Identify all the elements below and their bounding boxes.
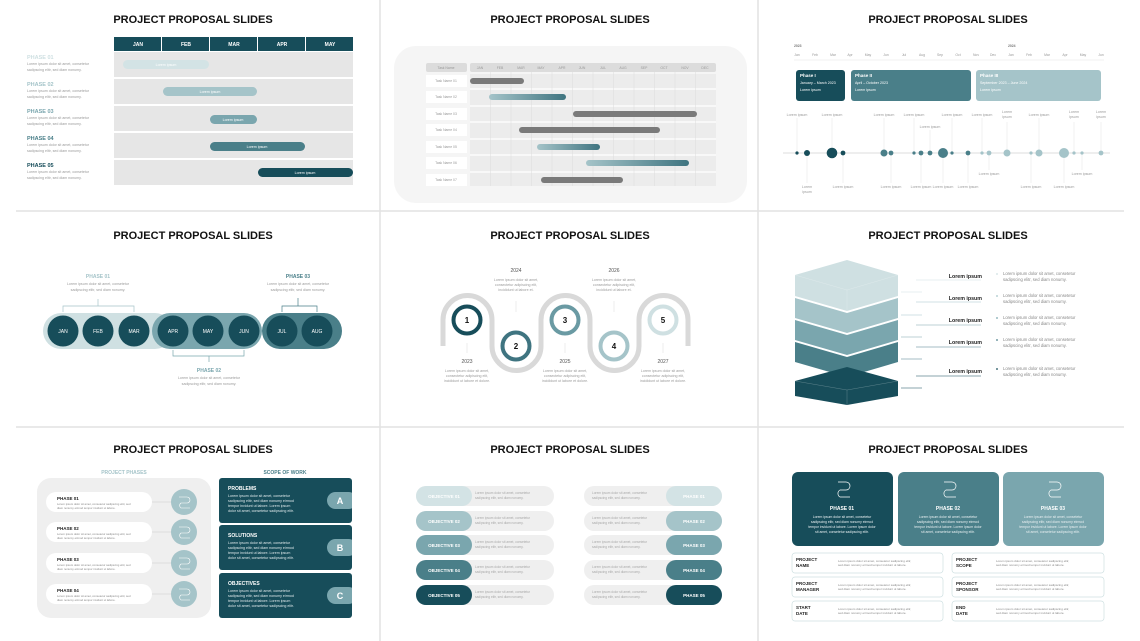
project phases column: diam nonumy eirmod tempor invidunt ut labore.	[57, 506, 116, 510]
phases list: sadipscing elitr, sed diam nonumy.	[592, 595, 641, 599]
project info table: Lorem ipsum dolor sit amet, consetetur sadipscing elitr,	[838, 559, 911, 563]
objectives list: Lorem ipsum dolor sit amet, consetetur	[475, 491, 531, 495]
objectives list: sadipscing elitr, sed diam nonumy.	[475, 570, 524, 574]
phase labels: sadipscing elitr, sed diam nonumy.	[27, 122, 82, 126]
phase pills: APR	[168, 329, 179, 335]
project info table: sed diam nonumy eirmod tempor invidunt ut labore.	[838, 587, 907, 591]
gantt grid: MAR	[517, 66, 525, 70]
project info table: PROJECT	[796, 557, 818, 562]
month axis: Jun	[883, 53, 889, 57]
month axis: Mar	[1044, 53, 1051, 57]
project phases column: PROJECT PHASES	[101, 470, 147, 476]
title: PROJECT PROPOSAL SLIDES	[113, 14, 273, 26]
dot timeline: Lorem ipsum	[874, 113, 894, 117]
objectives list: Lorem ipsum dolor sit amet, consetetur	[475, 540, 531, 544]
month header: MAY	[325, 42, 336, 48]
scope of work column: tempor invidunt ut labore. Lorem ipsum	[228, 551, 290, 555]
project info table: sed diam nonumy eirmod tempor invidunt ut labore.	[838, 563, 907, 567]
project info table: MANAGER	[796, 587, 820, 592]
phase cards	[792, 472, 1104, 546]
month axis: Feb	[812, 53, 818, 57]
gantt grid: OCT	[660, 66, 668, 70]
phase cards: sadipscing elitr, sed diam nonumy eirmod	[811, 520, 873, 524]
month axis	[794, 44, 1104, 60]
layer labels: sadipscing elitr, sed diam nonumy.	[1003, 321, 1067, 326]
phase labels: PHASE 01	[27, 55, 54, 61]
dot timeline: Lorem ipsum	[881, 185, 901, 189]
phase cards: sit amet, consetetur sadipscing elitr.	[815, 530, 869, 534]
phases list: PHASE 03	[683, 543, 705, 548]
dot timeline: Lorem	[802, 185, 812, 189]
phase labels with brackets: PHASE 02	[197, 368, 221, 374]
layer labels: Lorem ipsum dolor sit amet, consetetur	[1003, 315, 1076, 320]
project phases column: diam nonumy eirmod tempor invidunt ut labore.	[57, 598, 116, 602]
phase pills: MAR	[128, 329, 140, 335]
layer labels: Lorem ipsum	[949, 318, 982, 324]
phase boxes: September 2023 – June 2024	[980, 81, 1027, 85]
rows and bars	[114, 52, 353, 185]
scope of work column	[219, 470, 360, 618]
project phases column: PHASE 02	[57, 526, 79, 531]
project phases column: diam nonumy eirmod tempor invidunt ut labore.	[57, 567, 116, 571]
month axis: 2023	[794, 44, 802, 48]
phase labels: sadipscing elitr, sed diam nonumy.	[27, 95, 82, 99]
layer labels: sadipscing elitr, sed diam nonumy.	[1003, 299, 1067, 304]
phase pills: MAY	[203, 329, 214, 335]
title: PROJECT PROPOSAL SLIDES	[490, 14, 650, 26]
phases list: PHASE 01	[683, 494, 705, 499]
dot timeline: Lorem ipsum	[911, 185, 931, 189]
year labels: Lorem ipsum dolor sit amet,	[445, 369, 489, 373]
phase boxes: April – October 2023	[855, 81, 888, 85]
phase pills: AUG	[312, 329, 323, 335]
scope of work column: sadipscing elitr, sed diam nonumy eirmod	[228, 594, 294, 598]
phase labels with brackets: PHASE 01	[86, 274, 110, 280]
gantt grid	[426, 63, 716, 186]
panel: gantt 5 months	[27, 14, 353, 185]
dot timeline	[783, 110, 1110, 194]
phase labels with brackets: sadipscing elitr, sed diam nonumy.	[71, 288, 125, 292]
objectives list: OBJECTIVE 03	[428, 543, 460, 548]
panel: gantt 12 months	[394, 14, 747, 203]
dot timeline: ipsum	[1096, 115, 1106, 119]
phases list: PHASE 02	[683, 519, 705, 524]
gantt grid: APR	[559, 66, 566, 70]
month axis: Jun	[1098, 53, 1104, 57]
project info table: DATE	[956, 611, 968, 616]
project phases column: PHASE 03	[57, 557, 79, 562]
phase cards: sadipscing elitr, sed diam nonumy eirmod	[1022, 520, 1084, 524]
phase pills	[43, 313, 342, 349]
rows and bars: Lorem ipsum	[223, 118, 243, 122]
scope of work column: tempor invidunt ut labore. Lorem ipsum	[228, 599, 290, 603]
project info table: SCOPE	[956, 563, 972, 568]
phase cards: Lorem ipsum dolor sit amet, consetetur	[1024, 515, 1083, 519]
dot timeline: Lorem ipsum	[942, 113, 962, 117]
project info table	[792, 553, 1104, 621]
project phases column: diam nonumy eirmod tempor invidunt ut labore.	[57, 536, 116, 540]
gantt grid: JAN	[477, 66, 484, 70]
phase labels: Lorem ipsum dolor sit amet, consetetur	[27, 116, 90, 120]
phase boxes: January – March 2023	[800, 81, 836, 85]
panel: phases and scope of work	[37, 444, 360, 618]
project phases column: Lorem ipsum dolor sit amet, consetetur sadipscing elitr, sed	[57, 563, 131, 567]
month axis: Jul	[902, 53, 906, 57]
project info table: sed diam nonumy eirmod tempor invidunt ut labore.	[838, 611, 907, 615]
scope of work column: SOLUTIONS	[228, 533, 258, 539]
phase labels	[27, 55, 90, 180]
phase cards: tempor invidunt ut labore. Lorem ipsum dolor	[1019, 525, 1088, 529]
phase labels: Lorem ipsum dolor sit amet, consetetur	[27, 143, 90, 147]
numbered circles	[454, 306, 676, 360]
gantt grid: SEP	[641, 66, 648, 70]
month axis: Jan	[794, 53, 800, 57]
objectives list: sadipscing elitr, sed diam nonumy.	[475, 545, 524, 549]
gantt grid: Task Name 07	[435, 178, 457, 182]
objectives list: sadipscing elitr, sed diam nonumy.	[475, 496, 524, 500]
layer labels: Lorem ipsum dolor sit amet, consetetur	[1003, 366, 1076, 371]
year labels: incididunt ut labore et dolore.	[640, 379, 686, 383]
gantt grid: DEC	[701, 66, 709, 70]
phase cards: PHASE 02	[936, 506, 960, 512]
phase boxes: Phase I	[800, 73, 816, 78]
phase boxes: Lorem ipsum	[980, 88, 1001, 92]
project info table: PROJECT	[796, 581, 818, 586]
phases list: Lorem ipsum dolor sit amet, consetetur	[592, 565, 648, 569]
objectives list: Lorem ipsum dolor sit amet, consetetur	[475, 516, 531, 520]
layer labels: Lorem ipsum dolor sit amet, consetetur	[1003, 293, 1076, 298]
phase cards: Lorem ipsum dolor sit amet, consetetur	[813, 515, 872, 519]
project info table: END	[956, 605, 966, 610]
phase pills: FEB	[93, 329, 104, 335]
objectives list: OBJECTIVE 05	[428, 593, 460, 598]
year labels: consectetur adipiscing elit,	[495, 283, 537, 287]
project phases column: Lorem ipsum dolor sit amet, consetetur sadipscing elitr, sed	[57, 532, 131, 536]
year labels: Lorem ipsum dolor sit amet,	[592, 278, 636, 282]
phase labels with brackets: PHASE 03	[286, 274, 310, 280]
layer labels: sadipscing elitr, sed diam nonumy.	[1003, 372, 1067, 377]
phase labels: PHASE 03	[27, 109, 54, 115]
month axis: Mar	[830, 53, 837, 57]
phases list: sadipscing elitr, sed diam nonumy.	[592, 545, 641, 549]
objectives list: Lorem ipsum dolor sit amet, consetetur	[475, 565, 531, 569]
title: PROJECT PROPOSAL SLIDES	[490, 444, 650, 456]
title: PROJECT PROPOSAL SLIDES	[490, 230, 650, 242]
layer labels: Lorem ipsum dolor sit amet, consetetur	[1003, 271, 1076, 276]
phase labels with brackets: sadipscing elitr, sed diam nonumy.	[271, 288, 325, 292]
project info table: START	[796, 605, 811, 610]
project info table: NAME	[796, 563, 809, 568]
phases list: sadipscing elitr, sed diam nonumy.	[592, 570, 641, 574]
dot timeline: Lorem	[1096, 110, 1106, 114]
title: PROJECT PROPOSAL SLIDES	[868, 444, 1028, 456]
month axis: Aug	[919, 53, 925, 57]
dot timeline: Lorem ipsum	[787, 113, 807, 117]
objectives list	[416, 486, 554, 605]
dot timeline: Lorem ipsum	[904, 113, 924, 117]
project phases column: Lorem ipsum dolor sit amet, consetetur sadipscing elitr, sed	[57, 502, 131, 506]
layer labels: sadipscing elitr, sed diam nonumy.	[1003, 277, 1067, 282]
title: PROJECT PROPOSAL SLIDES	[868, 14, 1028, 26]
dot timeline: Lorem	[1069, 110, 1079, 114]
phases list	[584, 486, 722, 605]
gantt grid: Task Name 06	[435, 161, 457, 165]
gantt grid: AUG	[619, 66, 627, 70]
objectives list: OBJECTIVE 04	[428, 568, 460, 573]
dot timeline: Lorem ipsum	[979, 172, 999, 176]
gantt grid: Task Name	[438, 66, 455, 70]
scope of work column: PROBLEMS	[228, 486, 257, 492]
phase labels: Lorem ipsum dolor sit amet, consetetur	[27, 62, 90, 66]
phase labels: PHASE 04	[27, 136, 55, 142]
scope of work column: C	[337, 591, 344, 601]
objectives list: Lorem ipsum dolor sit amet, consetetur	[475, 590, 531, 594]
dot timeline: Lorem ipsum	[1054, 185, 1074, 189]
gantt grid: FEB	[497, 66, 504, 70]
scope of work column: sadipscing elitr, sed diam nonumy eirmod	[228, 499, 294, 503]
month axis: Apr	[847, 53, 854, 57]
phase cards: sit amet, consetetur sadipscing elitr.	[921, 530, 975, 534]
month axis: Nov	[973, 53, 979, 57]
dot timeline: Lorem ipsum	[822, 113, 842, 117]
year labels: 2025	[559, 359, 571, 365]
dot timeline: Lorem ipsum	[958, 185, 978, 189]
phase pills: JUN	[239, 329, 249, 335]
phase cards: PHASE 03	[1041, 506, 1065, 512]
year labels: 2023	[461, 359, 473, 365]
month header: MAR	[228, 42, 240, 48]
rows and bars: Lorem ipsum	[295, 171, 315, 175]
panel: winding timeline	[443, 230, 688, 383]
year labels: Lorem ipsum dolor sit amet,	[543, 369, 587, 373]
scope of work column: A	[337, 496, 344, 506]
scope of work column: dolor sit amet, consetetur sadipscing elitr.	[228, 604, 294, 608]
title: PROJECT PROPOSAL SLIDES	[113, 444, 273, 456]
dot timeline: Lorem ipsum	[1072, 172, 1092, 176]
phase labels: sadipscing elitr, sed diam nonumy.	[27, 176, 82, 180]
dot timeline: Lorem ipsum	[1021, 185, 1041, 189]
month header: APR	[277, 42, 288, 48]
phases list: Lorem ipsum dolor sit amet, consetetur	[592, 590, 648, 594]
rows and bars: Lorem ipsum	[200, 90, 220, 94]
month axis: May	[865, 53, 872, 57]
year labels: incididunt ut labore et dolore.	[542, 379, 588, 383]
month axis: May	[1080, 53, 1087, 57]
year labels: Lorem ipsum dolor sit amet,	[641, 369, 685, 373]
phases list: PHASE 05	[683, 593, 705, 598]
phase pills: JUL	[278, 329, 287, 335]
project phases column: Lorem ipsum dolor sit amet, consetetur sadipscing elitr, sed	[57, 594, 131, 598]
phase labels with brackets: Lorem ipsum dolor sit amet, consetetur	[67, 282, 130, 286]
panel: phase cards and project info	[792, 444, 1104, 621]
month axis: Sep	[937, 53, 943, 57]
year labels: consectetur adipiscing elit,	[544, 374, 586, 378]
layer labels	[901, 271, 1076, 388]
year labels: 2027	[657, 359, 669, 365]
month axis: Apr	[1062, 53, 1069, 57]
phase labels: Lorem ipsum dolor sit amet, consetetur	[27, 170, 90, 174]
layer labels: Lorem ipsum	[949, 340, 982, 346]
objectives list: sadipscing elitr, sed diam nonumy.	[475, 521, 524, 525]
objectives list: sadipscing elitr, sed diam nonumy.	[475, 595, 524, 599]
project info table: SPONSOR	[956, 587, 979, 592]
project info table: Lorem ipsum dolor sit amet, consetetur sadipscing elitr,	[996, 583, 1069, 587]
dot timeline: Lorem ipsum	[933, 185, 953, 189]
scope of work column: Lorem ipsum dolor sit amet, consetetur	[228, 541, 291, 545]
dot timeline: Lorem ipsum	[972, 113, 992, 117]
month axis: Oct	[955, 53, 961, 57]
year labels: consectetur adipiscing elit,	[593, 283, 635, 287]
rows and bars: Lorem ipsum	[247, 145, 267, 149]
project info table: sed diam nonumy eirmod tempor invidunt ut labore.	[996, 587, 1065, 591]
panel: stacked layers	[795, 230, 1076, 405]
year labels: consectetur adipiscing elit,	[446, 374, 488, 378]
layer labels: sadipscing elitr, sed diam nonumy.	[1003, 343, 1067, 348]
scope of work column: B	[337, 543, 344, 553]
numbered circles: 1	[465, 316, 470, 325]
phase labels with brackets	[63, 274, 330, 386]
phase boxes: Lorem ipsum	[855, 88, 876, 92]
panel: objectives and phases	[416, 444, 722, 605]
phase cards: Lorem ipsum dolor sit amet, consetetur	[919, 515, 978, 519]
project phases column	[37, 470, 211, 618]
phase labels with brackets: sadipscing elitr, sed diam nonumy.	[182, 382, 236, 386]
project info table: DATE	[796, 611, 808, 616]
phase cards: sit amet, consetetur sadipscing elitr.	[1026, 530, 1080, 534]
numbered circles: 5	[661, 316, 666, 325]
numbered circles: 3	[563, 316, 568, 325]
gantt grid: Task Name 01	[435, 79, 457, 83]
scope of work column: Lorem ipsum dolor sit amet, consetetur	[228, 589, 291, 593]
phase cards: tempor invidunt ut labore. Lorem ipsum dolor	[914, 525, 983, 529]
scope of work column: dolor sit amet, consetetur sadipscing elitr.	[228, 509, 294, 513]
layer labels: Lorem ipsum dolor sit amet, consetetur	[1003, 337, 1076, 342]
month header: JAN	[133, 42, 143, 48]
gantt grid: Task Name 03	[435, 112, 457, 116]
dot timeline: Lorem ipsum	[920, 125, 940, 129]
year labels: incididunt ut labore et.	[596, 288, 632, 292]
phase boxes: Phase II	[855, 73, 872, 78]
project info table: Lorem ipsum dolor sit amet, consetetur sadipscing elitr,	[996, 559, 1069, 563]
dot timeline: Lorem ipsum	[1029, 113, 1049, 117]
phase cards: PHASE 01	[830, 506, 854, 512]
numbered circles: 2	[514, 342, 519, 351]
scope of work column: OBJECTIVES	[228, 581, 260, 587]
phase boxes	[796, 70, 1101, 101]
gantt grid: Task Name 04	[435, 128, 457, 132]
rows and bars: Lorem ipsum	[156, 63, 176, 67]
layer labels: Lorem ipsum	[949, 369, 982, 375]
gantt grid: Task Name 02	[435, 95, 457, 99]
scope of work column: dolor sit amet, consetetur sadipscing elitr.	[228, 556, 294, 560]
phase labels: sadipscing elitr, sed diam nonumy.	[27, 68, 82, 72]
scope of work column: sadipscing elitr, sed diam nonumy eirmod	[228, 546, 294, 550]
gantt grid: Task Name 05	[435, 145, 457, 149]
month header: FEB	[181, 42, 191, 48]
phases list: Lorem ipsum dolor sit amet, consetetur	[592, 491, 648, 495]
panel: month circles phases	[43, 230, 342, 386]
gantt grid: JUN	[579, 66, 586, 70]
layer labels: Lorem ipsum	[949, 296, 982, 302]
gantt grid: NOV	[681, 66, 689, 70]
project info table: Lorem ipsum dolor sit amet, consetetur sadipscing elitr,	[996, 607, 1069, 611]
project info table: PROJECT	[956, 581, 978, 586]
objectives list: OBJECTIVE 02	[428, 519, 460, 524]
month axis: 2024	[1008, 44, 1016, 48]
year labels: 2026	[608, 268, 620, 274]
dot timeline: ipsum	[1002, 115, 1012, 119]
dot timeline: Lorem	[1002, 110, 1012, 114]
year labels: incididunt ut labore et.	[498, 288, 534, 292]
phase pills: JAN	[58, 329, 68, 335]
project info table: PROJECT	[956, 557, 978, 562]
phase labels: Lorem ipsum dolor sit amet, consetetur	[27, 89, 90, 93]
winding path	[443, 296, 688, 370]
month axis: Dec	[990, 53, 996, 57]
phase labels: PHASE 02	[27, 82, 54, 88]
year labels: 2024	[510, 268, 522, 274]
scope of work column: tempor invidunt ut labore. Lorem ipsum	[228, 504, 290, 508]
month header	[114, 37, 353, 51]
phase boxes: Phase III	[980, 73, 998, 78]
project phases column: PHASE 01	[57, 496, 79, 501]
scope of work column: Lorem ipsum dolor sit amet, consetetur	[228, 494, 291, 498]
year labels: consectetur adipiscing elit,	[642, 374, 684, 378]
dot timeline: ipsum	[1069, 115, 1079, 119]
chart background	[394, 46, 747, 203]
year labels: incididunt ut labore et dolore.	[444, 379, 490, 383]
phases list: Lorem ipsum dolor sit amet, consetetur	[592, 516, 648, 520]
dot timeline: Lorem ipsum	[833, 185, 853, 189]
year labels: Lorem ipsum dolor sit amet,	[494, 278, 538, 282]
gantt grid: JUL	[600, 66, 606, 70]
project info table: Lorem ipsum dolor sit amet, consetetur sadipscing elitr,	[838, 583, 911, 587]
phase cards: tempor invidunt ut labore. Lorem ipsum dolor	[808, 525, 877, 529]
layer stack	[795, 260, 898, 405]
project info table: sed diam nonumy eirmod tempor invidunt ut labore.	[996, 611, 1065, 615]
month axis: Jan	[1008, 53, 1014, 57]
scope of work column: SCOPE OF WORK	[263, 470, 307, 476]
phases list: sadipscing elitr, sed diam nonumy.	[592, 521, 641, 525]
title: PROJECT PROPOSAL SLIDES	[868, 230, 1028, 242]
project phases column: PHASE 04	[57, 588, 79, 593]
project info table: sed diam nonumy eirmod tempor invidunt ut labore.	[996, 563, 1065, 567]
numbered circles: 4	[612, 342, 617, 351]
phase cards: sadipscing elitr, sed diam nonumy eirmod	[917, 520, 979, 524]
phase labels with brackets: Lorem ipsum dolor sit amet, consetetur	[178, 376, 241, 380]
title: PROJECT PROPOSAL SLIDES	[113, 230, 273, 242]
layer labels: Lorem ipsum	[949, 274, 982, 280]
phases list: PHASE 04	[683, 568, 705, 573]
dot timeline: ipsum	[802, 190, 812, 194]
objectives list: OBJECTIVE 01	[428, 494, 460, 499]
month axis: Feb	[1026, 53, 1032, 57]
panel: dot timeline	[783, 14, 1110, 194]
project info table: Lorem ipsum dolor sit amet, consetetur sadipscing elitr,	[838, 607, 911, 611]
phase boxes: Lorem ipsum	[800, 88, 821, 92]
year labels	[444, 268, 686, 383]
phase labels: PHASE 05	[27, 163, 54, 169]
gantt grid: MAY	[537, 66, 545, 70]
phases list: Lorem ipsum dolor sit amet, consetetur	[592, 540, 648, 544]
phases list: sadipscing elitr, sed diam nonumy.	[592, 496, 641, 500]
phase labels: sadipscing elitr, sed diam nonumy.	[27, 149, 82, 153]
phase labels with brackets: Lorem ipsum dolor sit amet, consetetur	[267, 282, 330, 286]
gantt bars	[470, 78, 697, 183]
